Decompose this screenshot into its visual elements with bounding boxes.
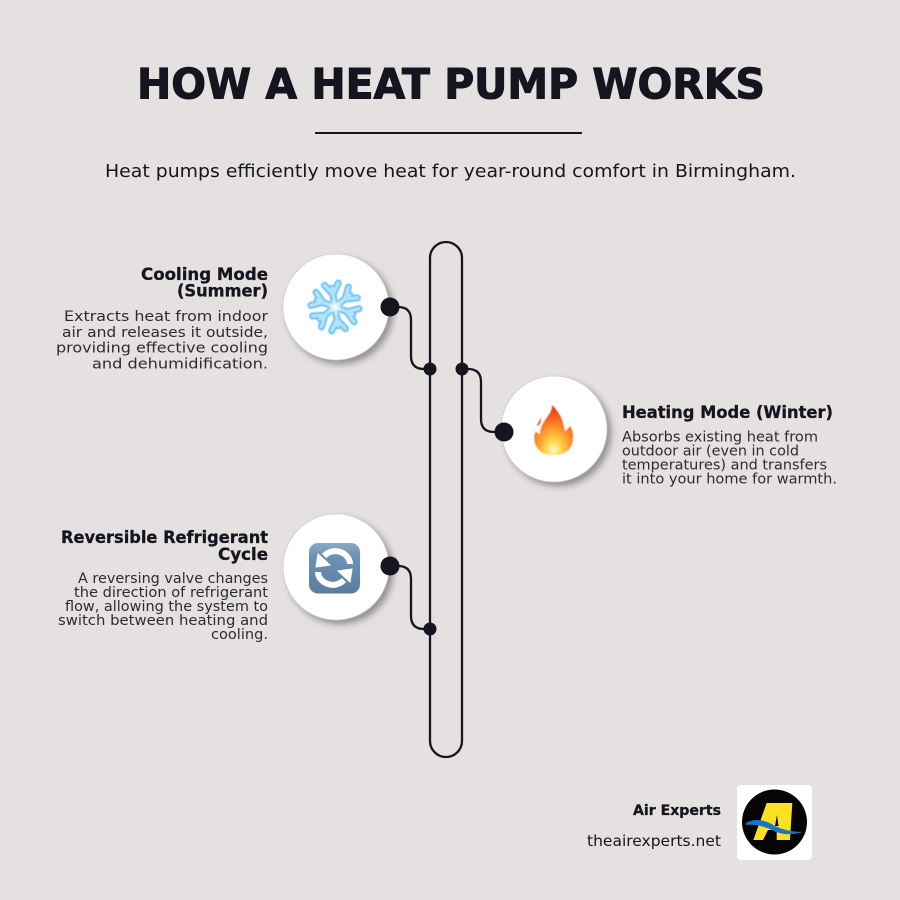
footer brand text: Air Experts [633,803,721,819]
cooling heading [141,265,268,300]
cooling description: Extracts heat from indoor [64,309,268,325]
cooling heading: Cooling Mode [141,265,268,284]
cooling description: and dehumidification. [92,356,268,372]
cooling description [56,309,268,372]
panel: cooling mode [56,254,400,372]
cycle description: flow, allowing the system to [65,599,268,615]
connector: heating [456,362,504,432]
cycle description [58,571,268,643]
cycle description: A reversing valve changes [78,571,268,587]
heating heading: Heating Mode (Winter) [622,403,833,422]
panel: heating mode [494,376,837,488]
cycle heading: Reversible Refrigerant [61,528,268,547]
heating description: outdoor air (even in cold [622,444,799,460]
cycle description: the direction of refrigerant [74,585,268,601]
logo: Air Experts [737,785,812,860]
heating description: temperatures) and transfers [622,458,827,474]
cycle heading [61,528,268,564]
central loop track [430,242,462,757]
cooling heading: (Summer) [177,282,268,300]
cycle description: cooling. [211,627,268,643]
cycle icon circle [283,514,389,620]
cycle node [380,556,400,576]
cooling icon circle [283,254,389,360]
connector: reversible cycle [390,566,436,636]
icon: snowflake [308,281,362,333]
heating description [622,430,837,488]
heating node [494,422,514,442]
cooling description: air and releases it outside, [62,325,268,341]
footer brand text [587,803,721,850]
panel: reversible refrigerant cycle [58,514,400,643]
title: HOW A HEAT PUMP WORKS [137,60,765,108]
heating description: it into your home for warmth. [622,472,837,488]
connector: cooling [390,307,436,376]
cooling description: providing effective cooling [56,340,268,356]
cycle description: switch between heating and [58,613,268,629]
cycle heading: Cycle [218,545,268,564]
heating description: Absorbs existing heat from [622,430,818,446]
subtitle: Heat pumps efficiently move heat for year-round comfort in Birmingham. [105,161,796,182]
footer brand text: theairexperts.net [587,832,721,850]
icon: refresh arrows [309,543,360,594]
cooling node [380,298,400,316]
icon: flame [534,405,573,455]
heating icon circle [501,376,607,482]
